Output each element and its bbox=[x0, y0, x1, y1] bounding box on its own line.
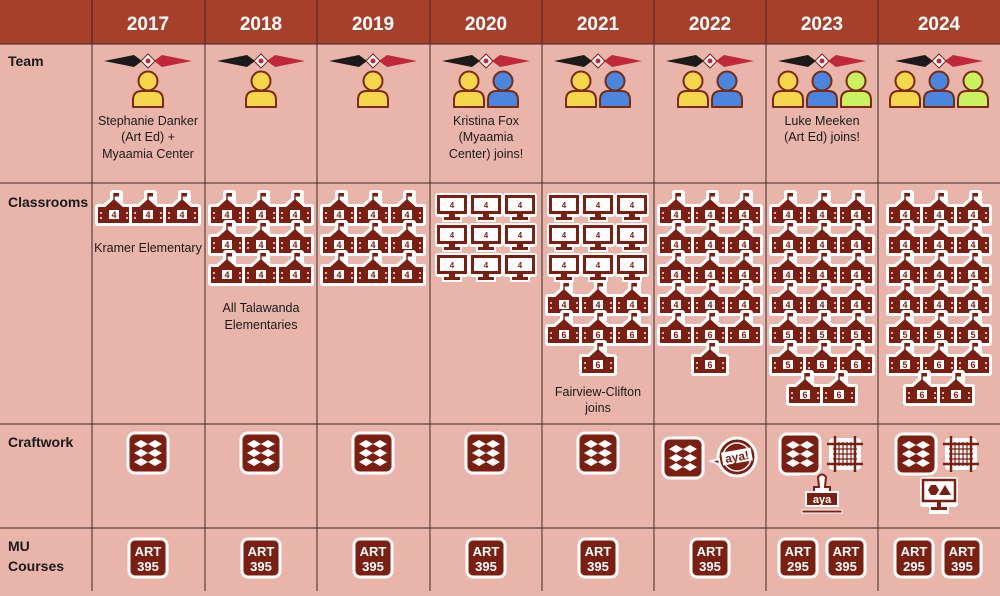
classrooms row bbox=[94, 193, 989, 415]
classrooms row: Elementaries bbox=[225, 318, 297, 332]
header bar: 2018 bbox=[240, 14, 282, 35]
MU courses row: ART bbox=[949, 544, 975, 559]
MU courses row: 395 bbox=[951, 559, 973, 574]
MU courses row bbox=[129, 539, 981, 577]
team row: (Art Ed) joins! bbox=[784, 130, 860, 144]
MU courses row: ART bbox=[785, 544, 811, 559]
MU courses row: 295 bbox=[903, 559, 925, 574]
MU courses row: ART bbox=[585, 544, 611, 559]
team row: (Art Ed) + bbox=[121, 130, 175, 144]
icon: aya bubble bbox=[711, 438, 756, 476]
header bar: 2017 bbox=[127, 14, 169, 35]
header bar: 2020 bbox=[465, 14, 507, 35]
MU courses row: ART bbox=[901, 544, 927, 559]
row labels: Craftwork bbox=[8, 434, 74, 450]
icon: stamp bbox=[800, 474, 844, 519]
icon: stamp: aya bbox=[813, 494, 832, 506]
MU courses row: 395 bbox=[137, 559, 159, 574]
row labels bbox=[8, 53, 88, 574]
MU courses row: ART bbox=[135, 544, 161, 559]
classrooms row: Kramer Elementary bbox=[94, 241, 203, 255]
MU courses row: 395 bbox=[250, 559, 272, 574]
classrooms row: All Talawanda bbox=[223, 301, 299, 315]
MU courses row: 395 bbox=[362, 559, 384, 574]
team row: Center) joins! bbox=[449, 147, 523, 161]
team row: Myaamia Center bbox=[102, 147, 194, 161]
header bar: 2019 bbox=[352, 14, 394, 35]
MU courses row: 395 bbox=[699, 559, 721, 574]
MU courses row: 395 bbox=[587, 559, 609, 574]
header bar: 2022 bbox=[689, 14, 731, 35]
MU courses row: ART bbox=[248, 544, 274, 559]
team row bbox=[98, 54, 988, 161]
header bar: 2023 bbox=[801, 14, 843, 35]
MU courses row: 395 bbox=[475, 559, 497, 574]
MU courses row: ART bbox=[697, 544, 723, 559]
MU courses row: 295 bbox=[787, 559, 809, 574]
MU courses row: 395 bbox=[835, 559, 857, 574]
team row: Luke Meeken bbox=[784, 114, 860, 128]
team row: Kristina Fox bbox=[453, 114, 520, 128]
MU courses row: ART bbox=[833, 544, 859, 559]
team row: (Myaamia bbox=[459, 130, 513, 144]
icon: computer shapes bbox=[920, 477, 958, 514]
row labels: MU bbox=[8, 538, 30, 554]
header bar: 2021 bbox=[577, 14, 620, 35]
row labels: Courses bbox=[8, 558, 64, 574]
header bar: 2024 bbox=[918, 14, 961, 35]
craftwork row bbox=[128, 433, 979, 519]
MU courses row: ART bbox=[360, 544, 386, 559]
team row: Stephanie Danker bbox=[98, 114, 198, 128]
classrooms row: joins bbox=[584, 401, 611, 415]
row labels: Team bbox=[8, 53, 44, 69]
classrooms row: Fairview-Clifton bbox=[555, 385, 641, 399]
icon: aya bubble: aya! bbox=[724, 448, 750, 466]
header bar bbox=[0, 0, 1000, 44]
row labels: Classrooms bbox=[8, 194, 88, 210]
MU courses row: ART bbox=[473, 544, 499, 559]
